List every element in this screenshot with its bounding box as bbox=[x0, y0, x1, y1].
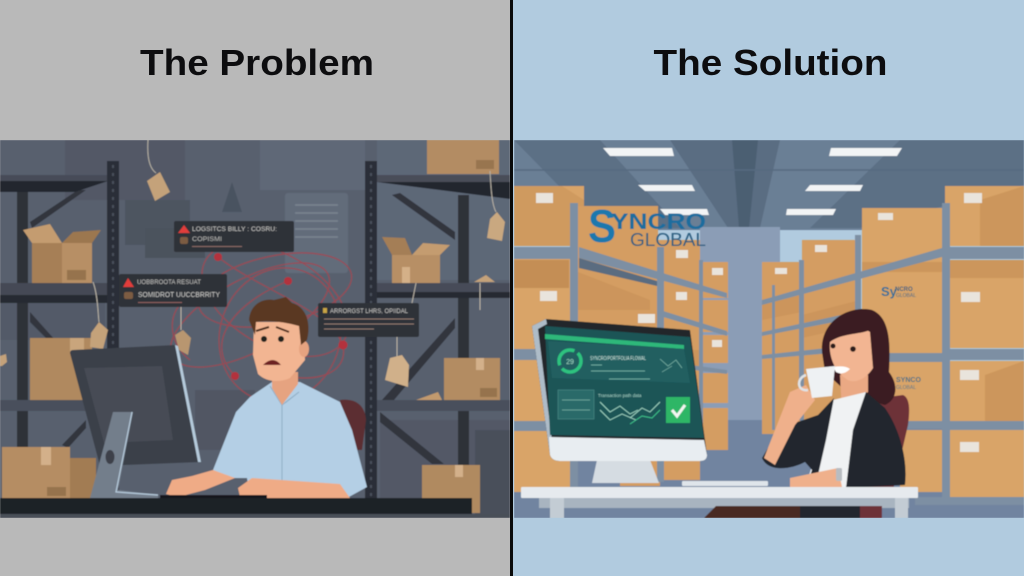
tag: edge bbox=[0, 354, 7, 366]
green check tile bbox=[666, 397, 690, 423]
left racking with boxes bbox=[514, 186, 728, 508]
stand cable hole bbox=[106, 450, 114, 464]
alert box: right bbox=[318, 303, 419, 337]
worried mouth bbox=[263, 360, 281, 365]
ceiling with lights bbox=[514, 140, 1024, 230]
Syncro Global logo: S bbox=[588, 200, 616, 252]
hanging price tags bbox=[0, 140, 505, 387]
cardboard boxes, problem side bbox=[2, 140, 500, 513]
box labels bbox=[536, 193, 723, 347]
back wall bbox=[700, 227, 780, 427]
alert box: top bbox=[174, 221, 294, 252]
tangled red lines bbox=[170, 251, 353, 397]
desk and keyboard bbox=[0, 495, 510, 518]
screen bbox=[545, 326, 704, 438]
network sketch bbox=[660, 359, 682, 372]
boxes: next bays bbox=[578, 206, 728, 486]
right blue background bbox=[512, 0, 1024, 576]
right racking with boxes bbox=[762, 186, 1024, 505]
hand on desk bbox=[790, 468, 842, 487]
progress ring bbox=[559, 350, 581, 372]
tag: lower right bbox=[385, 355, 409, 387]
monitor body bbox=[70, 345, 201, 466]
title: The Problem: The Problem bbox=[140, 42, 374, 83]
ceiling lights bbox=[603, 148, 902, 215]
alert box: top: LOGSITCS BILLY : COSRU: bbox=[192, 226, 277, 233]
dashboard text: SYNCRO/PORTFOLIA FLOWAL bbox=[590, 356, 646, 362]
raised arm bbox=[764, 385, 815, 465]
shelves and uprights bbox=[762, 203, 1024, 505]
hair bbox=[249, 297, 309, 345]
panel: problem warehouse scene bbox=[0, 140, 510, 518]
alert box: right: ARRORGST LHRS, OPIIDAL bbox=[330, 308, 408, 315]
box: bottom right bbox=[422, 465, 480, 513]
eyes bbox=[830, 344, 836, 348]
small data table bbox=[558, 390, 594, 419]
boxes: middle bay bbox=[862, 208, 942, 492]
small logo: printed on lower box: GLOBAL bbox=[896, 385, 916, 391]
forearms and hands bbox=[166, 470, 235, 497]
tag: top bbox=[147, 172, 170, 201]
woman's chair bbox=[860, 395, 909, 490]
neck bbox=[840, 375, 868, 415]
warehouse back wall bbox=[0, 140, 510, 518]
box labels bbox=[775, 193, 982, 452]
boxes: far left column bbox=[514, 186, 584, 492]
box: open right shelf bbox=[382, 237, 450, 283]
tag: top right bbox=[487, 212, 505, 241]
small logo: printed on box: NCRO bbox=[895, 287, 913, 293]
status bar bbox=[545, 334, 684, 349]
small logo: printed on box: Sy bbox=[881, 284, 898, 299]
shirt bbox=[213, 382, 367, 498]
left grey background bbox=[0, 0, 511, 576]
title: The Solution: The Solution bbox=[654, 42, 888, 83]
small logo: printed on lower box: SYNCO bbox=[896, 377, 921, 384]
alert box: top: COPISMI bbox=[192, 236, 222, 243]
floor bbox=[514, 420, 1024, 518]
boxes: aisle rear bbox=[762, 240, 860, 434]
eyes bbox=[261, 336, 267, 342]
monitor frame bbox=[532, 319, 707, 461]
coffee cup bbox=[806, 366, 835, 398]
solution computer monitor bbox=[532, 319, 707, 483]
ear bbox=[299, 341, 309, 357]
box shading, next bays bbox=[578, 272, 700, 366]
box: bottom left bbox=[2, 447, 96, 498]
tag: centre bbox=[175, 330, 191, 355]
hair fringe bbox=[822, 313, 885, 362]
box shading bbox=[862, 186, 1024, 421]
worried man at desk bbox=[166, 297, 367, 498]
alert box: left bbox=[119, 274, 227, 307]
Syncro Global logo: GLOBAL bbox=[630, 230, 706, 250]
shelves and uprights bbox=[514, 203, 727, 508]
progress ring: 29 bbox=[566, 359, 574, 366]
right shelving unit bbox=[365, 161, 510, 501]
box shading, aisle bbox=[762, 290, 860, 338]
eyebrows bbox=[256, 327, 289, 332]
face bbox=[830, 327, 873, 381]
worker chair bbox=[340, 400, 366, 450]
monitor chin bbox=[549, 437, 707, 461]
red alert nodes bbox=[214, 253, 348, 380]
left shelving unit bbox=[0, 161, 119, 501]
keyboard bbox=[682, 481, 768, 486]
box: left middle shelf bbox=[30, 338, 92, 400]
small logo: printed on lower box bbox=[896, 377, 921, 391]
blouse bbox=[805, 392, 866, 488]
blazer bbox=[762, 392, 906, 488]
neck bbox=[272, 372, 298, 405]
box: right lower shelf bbox=[416, 358, 500, 400]
tag: shelf bbox=[474, 275, 495, 282]
small logo: printed on box bbox=[881, 284, 916, 299]
monitor stand bbox=[90, 412, 158, 498]
Syncro Global logo bbox=[588, 200, 706, 252]
tag: left bbox=[90, 322, 108, 349]
Syncro Global logo: YNCRO bbox=[611, 209, 706, 234]
monitor stand bbox=[592, 460, 659, 483]
box: top right bbox=[427, 140, 499, 174]
computer monitor, back view bbox=[70, 345, 201, 498]
line charts bbox=[598, 393, 660, 424]
face bbox=[253, 322, 305, 381]
dashboard text bbox=[590, 356, 650, 379]
upper dashboard panel bbox=[548, 341, 690, 383]
alert box: left: UOBBROOTA RESUAT bbox=[137, 279, 201, 286]
watch bbox=[836, 468, 842, 481]
alert box: left: SOMIDROT UUCCBRRITY bbox=[138, 292, 220, 299]
central divider bbox=[510, 0, 513, 576]
boxes: near column bbox=[945, 186, 1024, 497]
tag strings bbox=[93, 140, 496, 357]
panel: solution warehouse scene bbox=[514, 140, 1024, 518]
line charts: Transaction path data bbox=[598, 393, 642, 398]
hair back bbox=[822, 309, 895, 405]
smiling woman with coffee bbox=[762, 309, 906, 488]
small logo: printed on box: GLOBAL bbox=[896, 293, 916, 299]
box shading bbox=[514, 186, 584, 288]
smile bbox=[833, 366, 850, 373]
box: open left shelf bbox=[23, 224, 101, 283]
white desk bbox=[521, 487, 918, 518]
